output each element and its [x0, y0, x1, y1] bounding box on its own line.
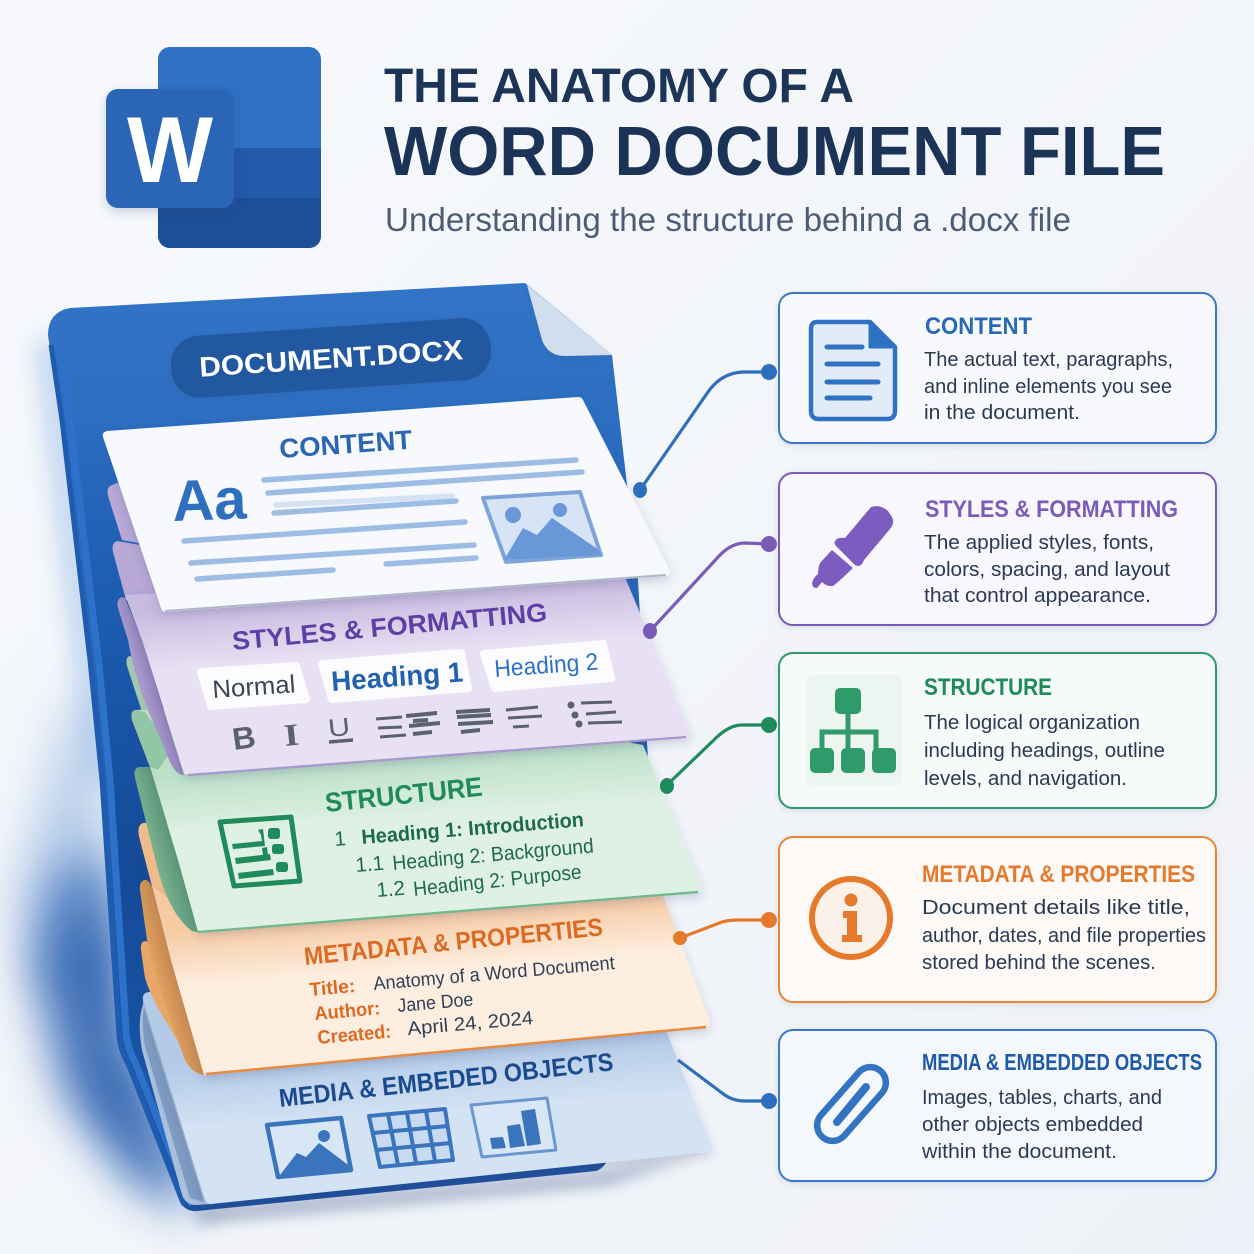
layer heading: STYLES & FORMATTING [231, 597, 548, 656]
layer: styles and formatting [108, 480, 690, 775]
style chip: Heading 2: Heading 2 [493, 648, 599, 683]
icon: paperclip [811, 1061, 892, 1147]
icon: outline list [220, 817, 300, 886]
text lines [184, 460, 582, 579]
formatting toolbar: B [230, 719, 258, 757]
panel: metadata and properties [779, 837, 1216, 1002]
metadata rows: Author: [314, 998, 381, 1025]
title: THE ANATOMY OF A [384, 60, 854, 113]
icon: info [812, 879, 890, 957]
layer heading: STRUCTURE [323, 772, 484, 818]
card text [922, 896, 1206, 974]
icon: Word logo [106, 47, 321, 248]
page fold [527, 285, 612, 356]
card heading: METADATA & PROPERTIES [922, 861, 1195, 888]
card text: Images, tables, charts, and [922, 1086, 1162, 1109]
layer: content [103, 397, 670, 612]
metadata rows: Anatomy of a Word Document [373, 953, 616, 995]
formatting toolbar: I [282, 717, 301, 753]
outline rows: Heading 2: Background [391, 834, 595, 875]
panel: media and embedded objects [779, 1030, 1216, 1181]
panel: styles and formatting [779, 473, 1216, 625]
document stack [48, 283, 712, 1211]
card text: The actual text, paragraphs, [924, 348, 1173, 371]
outline rows: Heading 1: Introduction [361, 808, 585, 849]
filename pill: DOCUMENT.DOCX [198, 334, 464, 383]
card text: that control appearance. [924, 584, 1151, 607]
metadata rows [309, 953, 616, 1049]
card heading: CONTENT [925, 313, 1032, 340]
panel: content [779, 293, 1216, 443]
layer heading: CONTENT [278, 425, 414, 464]
style chip: Normal [201, 666, 306, 706]
connector: content [633, 364, 777, 498]
card text: and inline elements you see [924, 375, 1172, 398]
connector: metadata [673, 912, 777, 945]
card text: in the document. [924, 401, 1080, 424]
connector: structure [660, 717, 777, 794]
Aa glyph: Aa [171, 466, 248, 534]
formatting toolbar: U [327, 713, 352, 743]
metadata rows: Jane Doe [397, 989, 474, 1017]
metadata rows: Title: [309, 976, 356, 1001]
card heading: STRUCTURE [924, 674, 1052, 701]
card text: The logical organization [924, 711, 1140, 734]
icon: picture [267, 1118, 351, 1177]
subtitle: Understanding the structure behind a .docx file [385, 201, 1071, 238]
icon: Word logo: W [127, 97, 213, 202]
icon: highlighter [812, 506, 893, 588]
filename pill [169, 316, 493, 400]
card heading: STYLES & FORMATTING [925, 496, 1178, 523]
card text: stored behind the scenes. [922, 951, 1156, 974]
card text [924, 711, 1165, 790]
card text: colors, spacing, and layout [924, 558, 1170, 581]
card text: Document details like title, [922, 896, 1190, 919]
card text [921, 1086, 1162, 1163]
card text: The applied styles, fonts, [924, 531, 1154, 554]
metadata rows: Created: [317, 1022, 392, 1049]
card text: including headings, outline [924, 739, 1165, 762]
layer: structure [126, 656, 702, 932]
metadata rows: April 24, 2024 [407, 1008, 534, 1040]
icon: table [369, 1109, 453, 1167]
icon: picture [483, 492, 601, 562]
outline rows: 1.1 [355, 852, 385, 877]
outline rows: 1 [334, 827, 347, 851]
layer heading: METADATA & PROPERTIES [303, 913, 604, 971]
title [384, 60, 1165, 190]
card text: author, dates, and file properties [922, 924, 1206, 947]
title: WORD DOCUMENT FILE [384, 112, 1165, 190]
card text: other objects embedded [922, 1113, 1143, 1136]
icon: bar chart [471, 1098, 556, 1157]
icon: hierarchy [806, 675, 902, 785]
layer: metadata and properties [139, 822, 710, 1075]
outline rows: 1.2 [376, 877, 406, 902]
document body [48, 283, 648, 1211]
layer: media and embedded objects [140, 992, 712, 1205]
connector: styles [643, 536, 777, 639]
card text: levels, and navigation. [924, 767, 1127, 790]
style chip: Normal: Normal [211, 670, 296, 704]
panel: structure [779, 653, 1216, 808]
formatting toolbar [230, 702, 622, 757]
card text [924, 348, 1173, 424]
outline rows: Heading 2: Purpose [412, 860, 583, 901]
card text: within the document. [921, 1140, 1117, 1163]
icon: document [811, 322, 895, 419]
style chip: Heading 2 [484, 644, 611, 688]
style chip: Heading 1: Heading 1 [330, 656, 464, 697]
layer heading: MEDIA & EMBEDED OBJECTS [278, 1048, 615, 1113]
outline rows [334, 808, 595, 902]
connector: media [678, 1060, 777, 1109]
card text [924, 531, 1170, 607]
